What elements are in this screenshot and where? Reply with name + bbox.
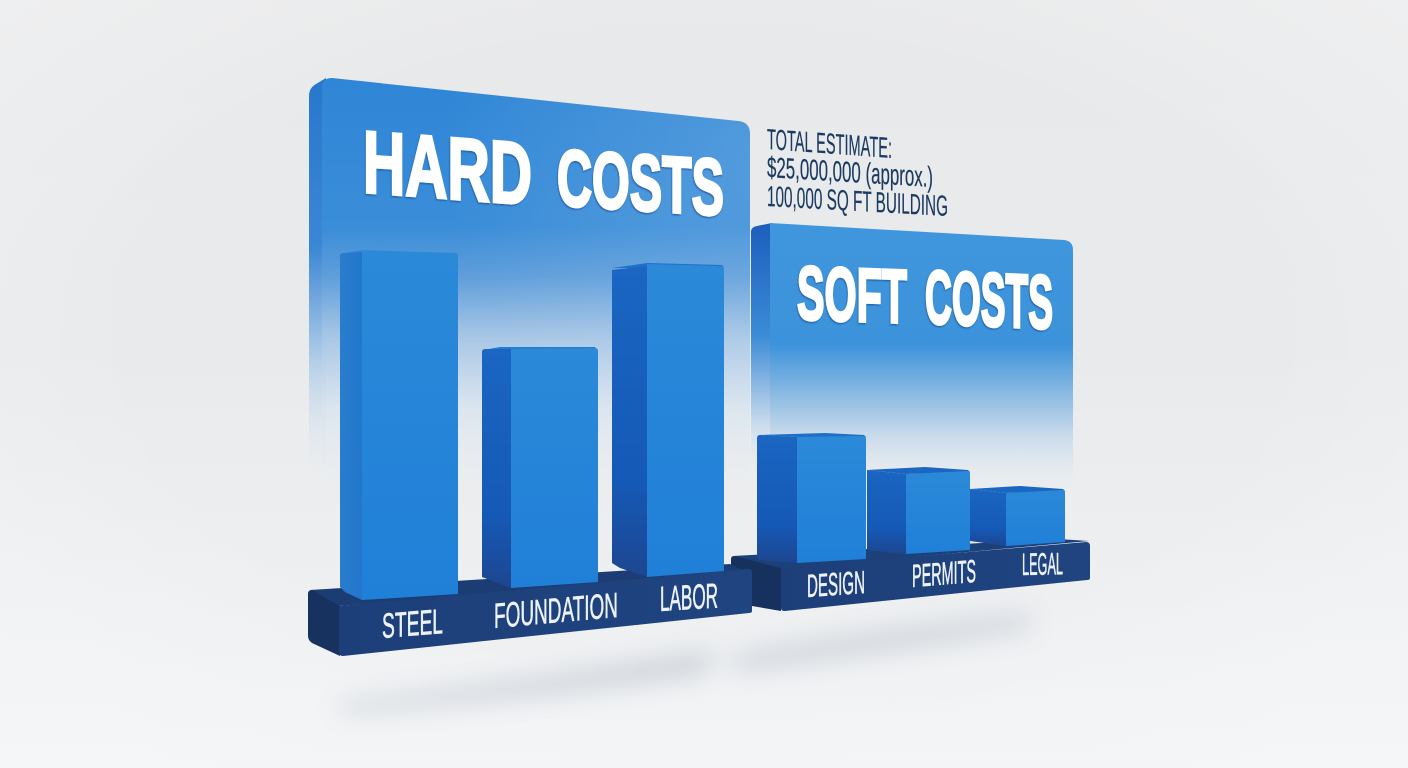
text: LEGAL [1022,546,1063,582]
floor shadow: hard costs [340,652,720,712]
label: foundation: FOUNDATION [494,586,618,636]
soft base side face [731,556,781,611]
bar: steel [340,250,458,600]
floor shadow: soft costs [735,616,1030,670]
bar: permits [867,467,970,554]
heading: soft costs: SOFT [797,251,907,340]
hard costs base [308,564,752,656]
hard panel side face [309,78,326,500]
bar: legal [970,486,1065,546]
hard panel front face [322,78,750,500]
total estimate callout: TOTAL ESTIMATE: [767,124,892,165]
hard base side face [308,590,340,656]
soft costs base [731,539,1090,611]
label: steel: STEEL [382,602,443,646]
heading: hard costs: COSTS [557,133,724,232]
panel: soft costs: COSTS [925,255,1053,346]
bar: foundation [482,347,598,588]
heading: hard costs: HARD [363,112,532,224]
panel: hard costs [309,78,750,500]
soft panel side face [751,223,772,480]
text: PERMITS [912,553,976,594]
heading: hard costs [363,112,724,232]
bar: design [757,433,866,563]
bar: labor [612,263,724,577]
panel: soft costs [751,223,1073,490]
text: LABOR [660,577,718,619]
total estimate callout: 100,000 SQ FT BUILDING [767,181,948,223]
soft base front face [781,542,1090,611]
total estimate callout [767,124,948,223]
soft base top face [733,539,1089,569]
text: DESIGN [807,564,865,604]
total estimate callout: $25,000,000 (approx.) [767,152,933,194]
hard base top face [310,564,752,606]
soft panel front face [770,223,1073,490]
hard base front face [339,569,752,656]
